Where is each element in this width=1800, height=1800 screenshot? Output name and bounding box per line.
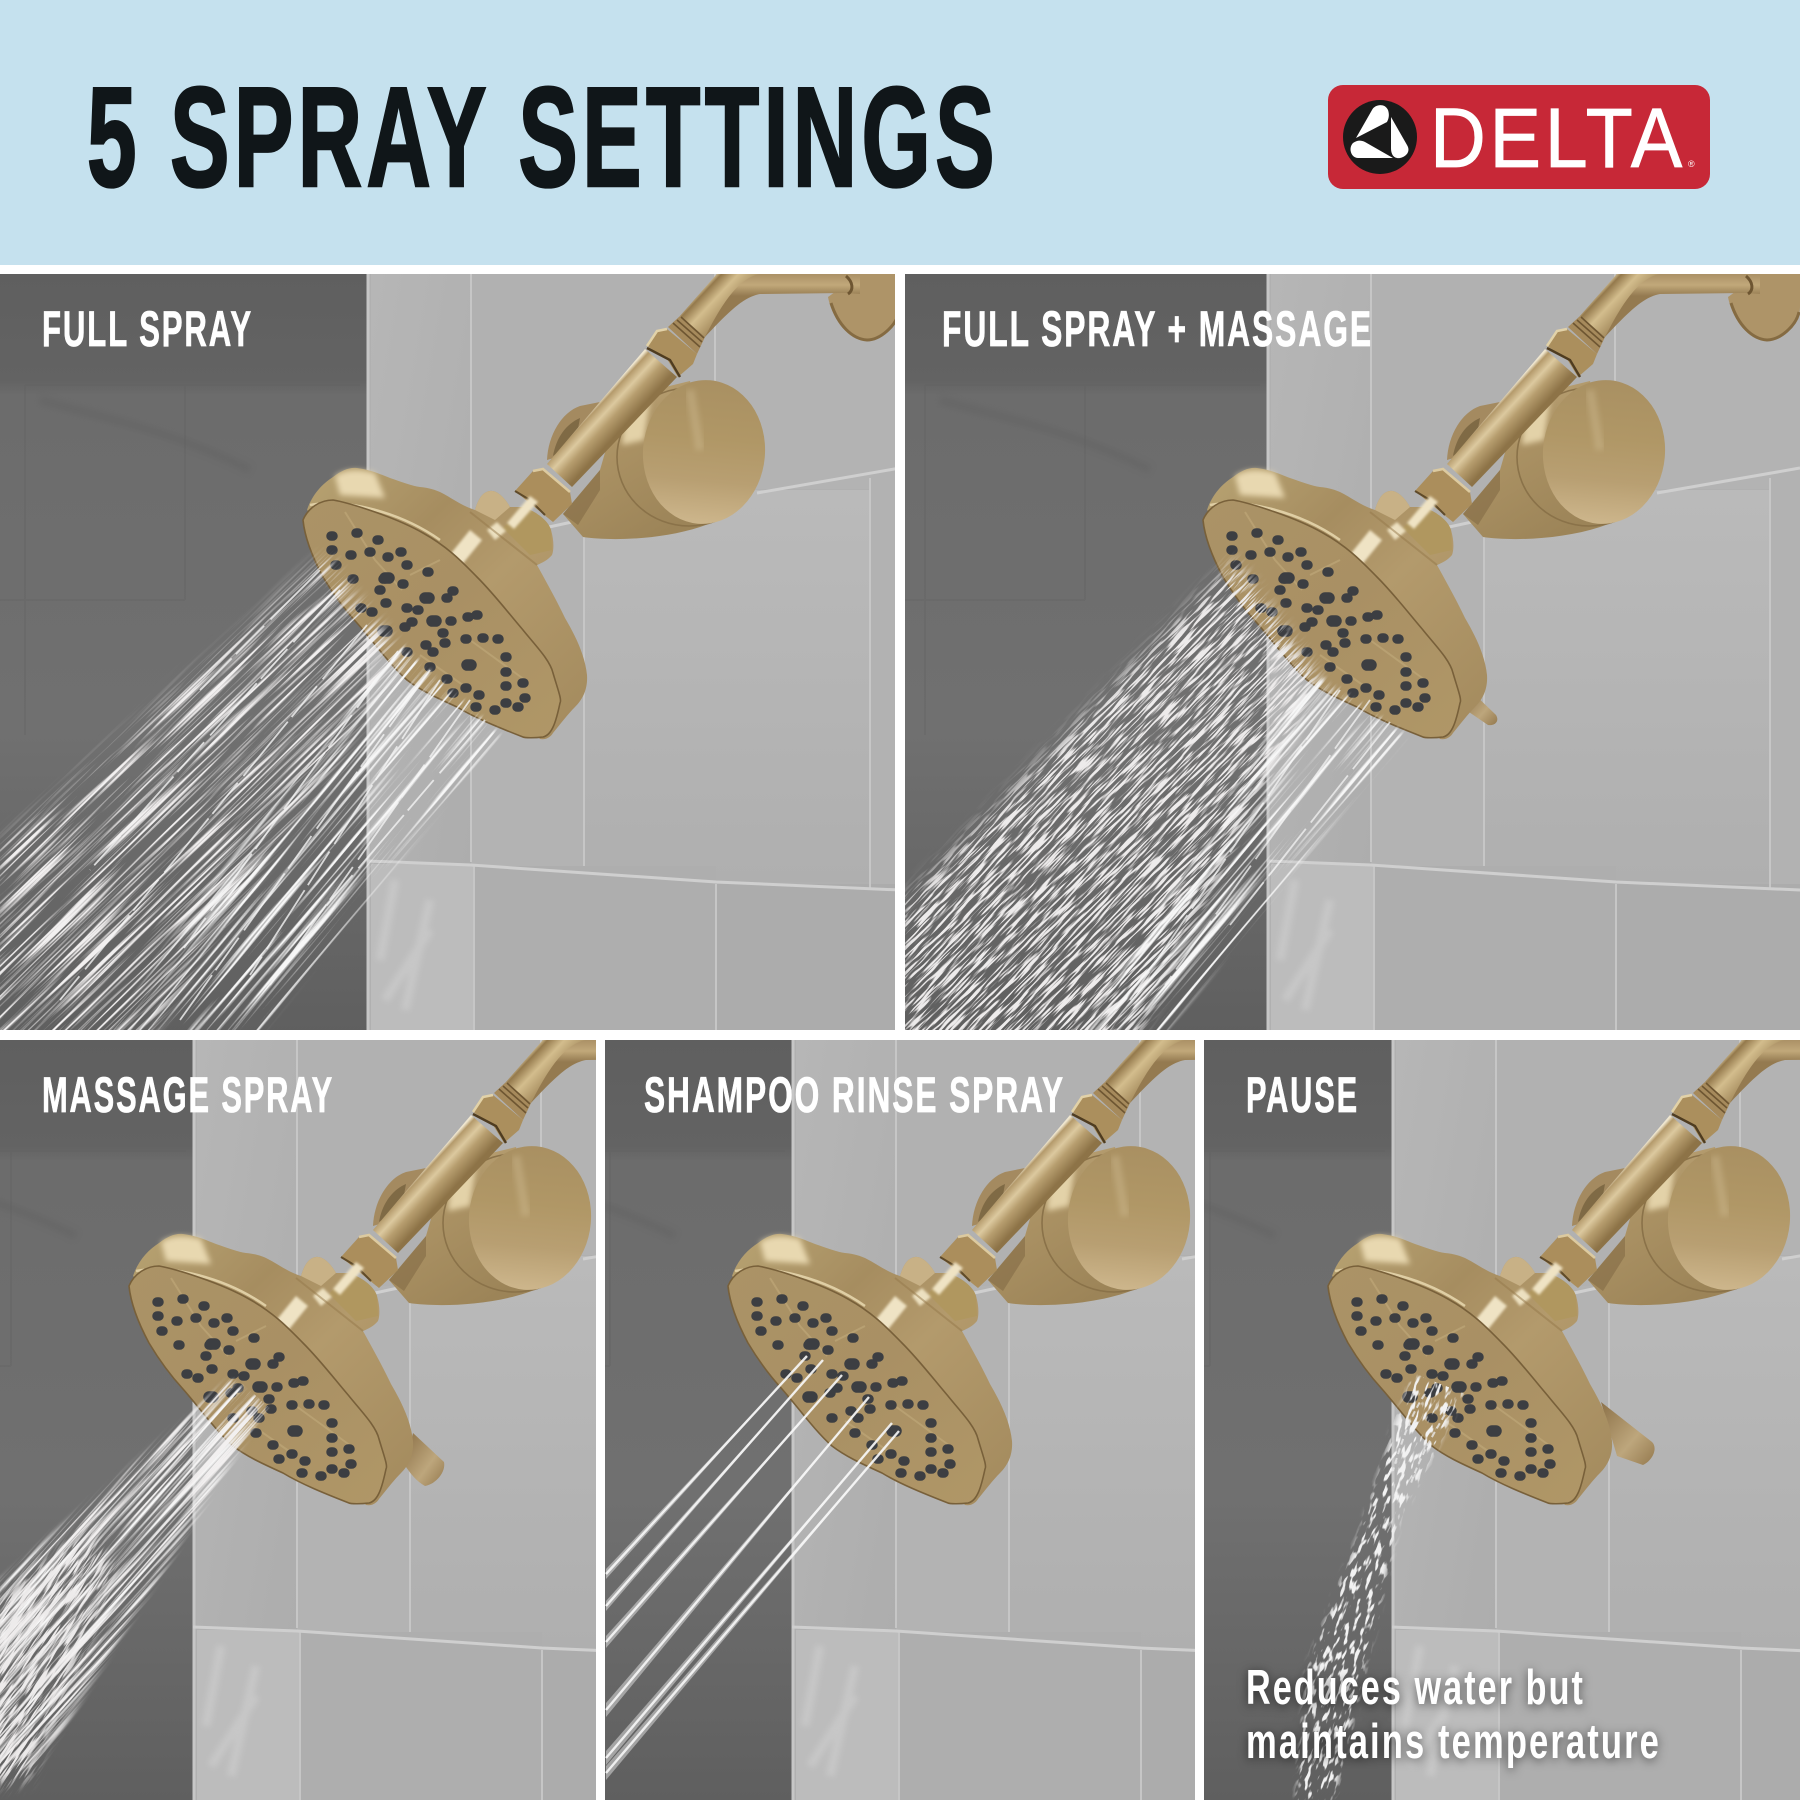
panel: full spray + massage [905, 274, 1800, 1030]
shower fixture [1203, 274, 1800, 739]
label: pause: PAUSE [1246, 1067, 1359, 1123]
label: massage spray: MASSAGE SPRAY [42, 1067, 334, 1123]
spray: full [60, 570, 485, 1020]
header band [0, 0, 1800, 265]
label: full spray: FULL SPRAY [42, 301, 253, 357]
wordmark: DELTA [1430, 91, 1686, 185]
wall background [0, 274, 900, 1034]
panel: full spray [0, 274, 895, 1030]
registered mark: ® [1688, 159, 1695, 169]
wall background [1025, 1040, 1800, 1800]
spray: droplets [1393, 1386, 1450, 1486]
shower fixture [303, 274, 900, 739]
label: full spray + massage: FULL SPRAY + MASSAGE [942, 301, 1373, 357]
lever tab [1466, 689, 1497, 725]
shower fixture [1328, 1040, 1800, 1505]
icon: Delta emblem [1343, 100, 1417, 174]
title: 5 SPRAY SETTINGS [87, 58, 999, 217]
wall background [0, 1040, 726, 1800]
pause description [1246, 1661, 1661, 1769]
lever tab [406, 1433, 444, 1486]
panel: shampoo rinse spray [605, 1040, 1195, 1800]
panel: massage spray [0, 1040, 596, 1800]
spray: massage [255, 1395, 256, 1397]
pause description: Reduces water but [1246, 1661, 1585, 1715]
panel: pause [1204, 1040, 1800, 1800]
logo: Delta [1328, 85, 1710, 189]
wall background [900, 274, 1800, 1034]
lever tab [1601, 1402, 1655, 1465]
shower fixture [728, 1040, 1325, 1505]
spray: chopped droplets + streams [1130, 599, 1390, 1000]
spray: thin streams [606, 1356, 899, 1780]
label: shampoo rinse spray: SHAMPOO RINSE SPRAY [644, 1067, 1065, 1123]
wall background [425, 1040, 1325, 1800]
shower fixture [129, 1040, 726, 1505]
